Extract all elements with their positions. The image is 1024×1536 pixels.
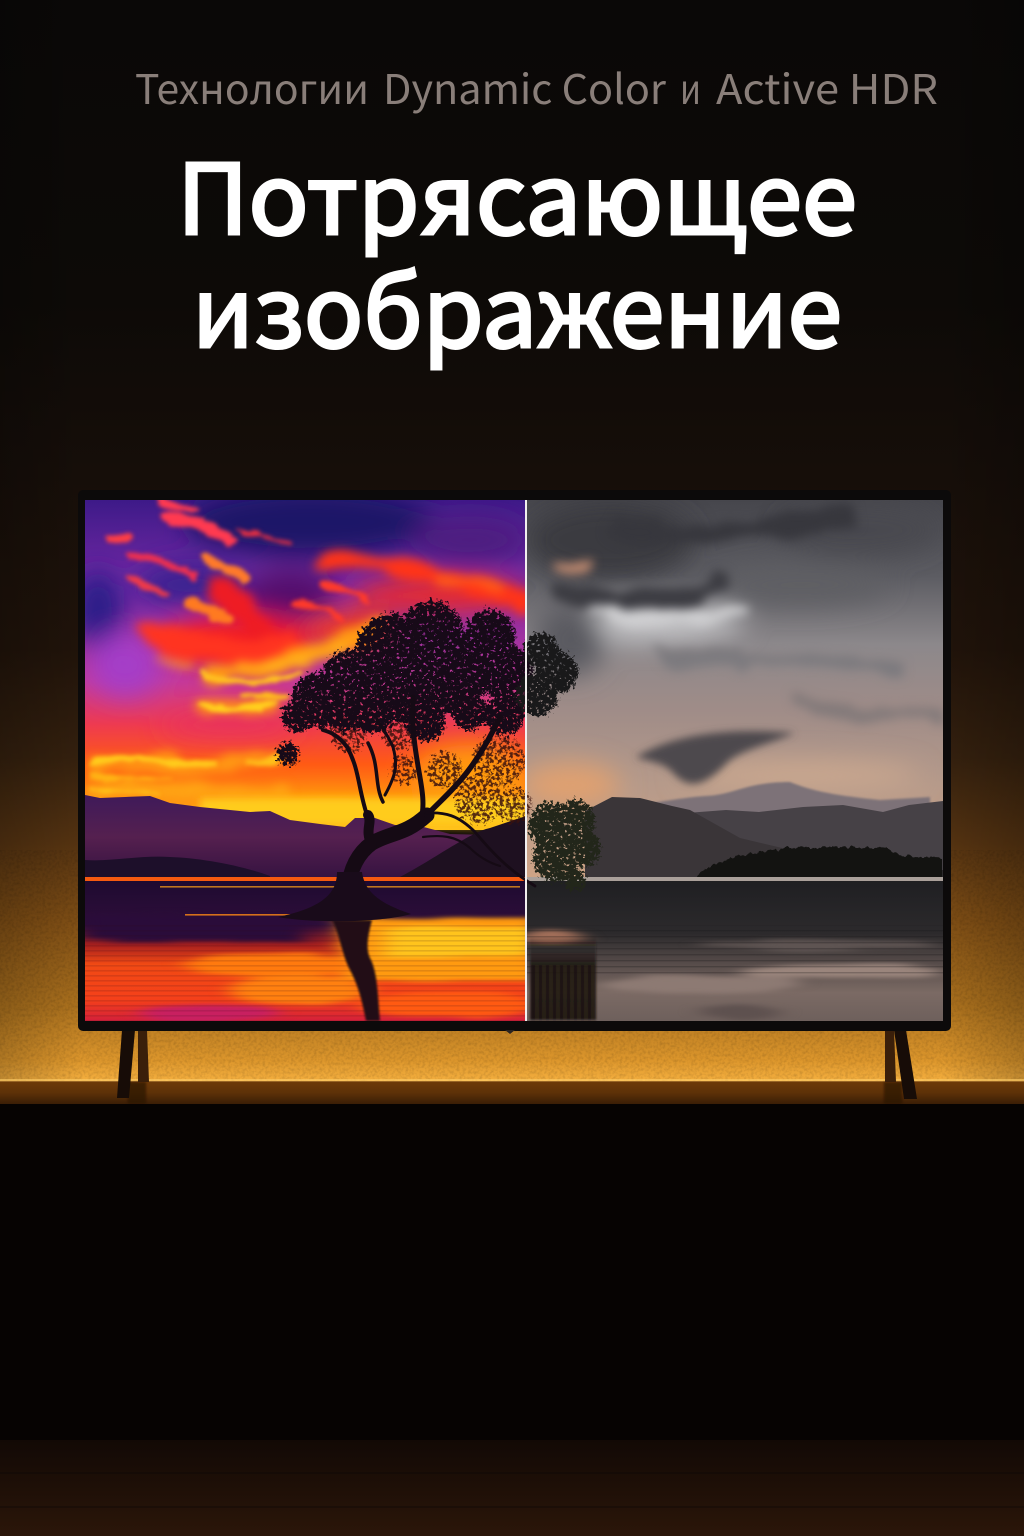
centre divider line [525,500,527,1021]
screen left: vivid HDR half [72,488,540,1022]
crown right of divider [516,633,578,716]
tree crown [277,601,533,765]
ripple lines [527,930,943,974]
forest island [697,847,943,880]
fine bright cloud streaks [90,502,365,795]
tv logo notch [505,1030,515,1034]
title: Потрясающее [177,121,857,262]
subtitle: Технологии [135,56,369,116]
subtitle: Dynamic Color [383,56,666,116]
bright horizon band [200,798,526,826]
small tree reflection [530,935,596,1020]
tree reflection [332,920,380,1021]
water reflections [85,915,540,1022]
sideboard shelf [0,1079,1024,1440]
grey mountains [585,797,943,880]
muted sky [526,500,943,880]
trunk base [278,872,411,921]
tv stand legs [117,1030,917,1099]
title: изображение [192,234,842,375]
subtitle [135,56,938,116]
purple mountains [85,795,526,880]
trunk and branches [323,697,535,890]
horizon line [526,877,943,881]
horizon glow lines [85,877,526,916]
sparse orange-side foliage [332,717,533,824]
water ripple lines [85,925,526,1021]
screen right: muted standard half [515,500,943,1021]
vivid sky [85,500,526,830]
subtitle: Active HDR [716,56,938,116]
small green tree [529,800,601,891]
subtitle: и [680,56,701,116]
distant cloud bank [655,780,931,812]
grey cloud detail [560,520,940,718]
vivid lake water [85,880,526,1021]
tv bezel [78,490,951,1031]
soft grey masses [520,500,940,807]
tree silhouette [277,601,601,921]
water ripples [515,933,940,1019]
red and orange cloud masses [95,560,522,792]
wooden floor [0,1440,1024,1536]
muted lake water [526,880,943,1021]
title [177,121,857,375]
soft sky colour masses [72,488,530,826]
dark drifting cloud [636,731,795,784]
